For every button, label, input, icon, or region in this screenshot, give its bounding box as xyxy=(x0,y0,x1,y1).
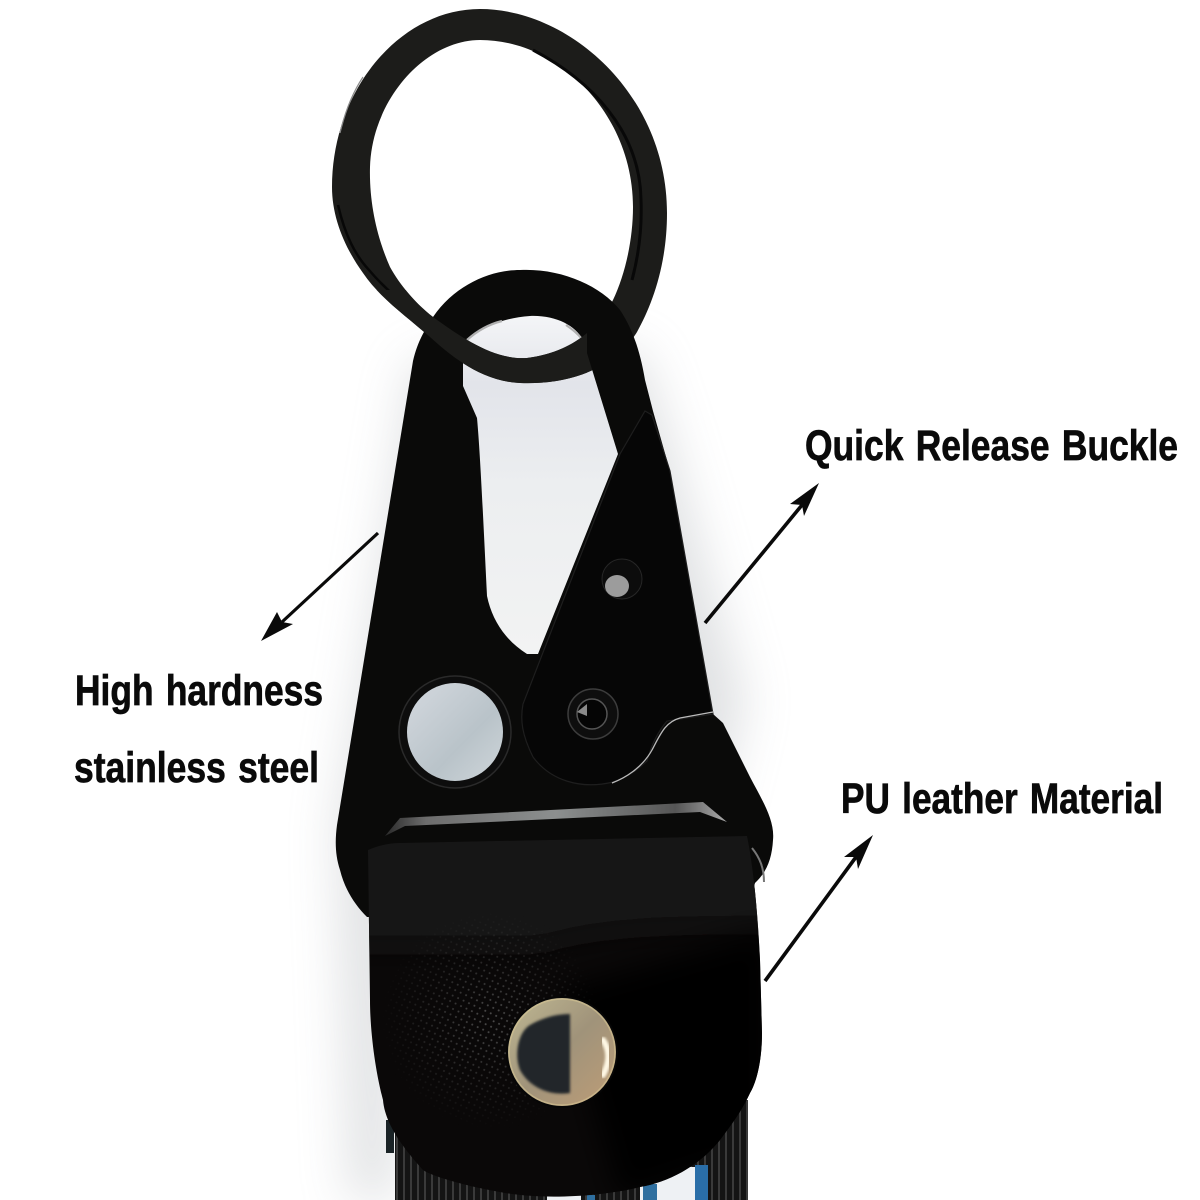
arrow: high hardness stainless steel xyxy=(261,533,378,641)
buckle body with hook and holes xyxy=(336,270,773,917)
arrow: quick release buckle xyxy=(705,483,819,623)
hook inner gloss xyxy=(467,321,582,340)
ring front segment xyxy=(376,290,587,384)
latch small hole xyxy=(602,559,642,599)
metal slot highlight xyxy=(385,802,764,882)
strap xyxy=(386,1100,748,1200)
label: high hardness stainless steel: High hardness xyxy=(75,667,323,715)
opening backdrop xyxy=(463,316,618,654)
split key ring xyxy=(332,9,667,383)
latch xyxy=(522,411,713,785)
latch pivot screw xyxy=(568,689,618,739)
arrow: PU leather material xyxy=(765,835,873,981)
PU leather flap xyxy=(368,836,762,1197)
label: high hardness stainless steel xyxy=(74,667,323,792)
soft shadow around buckle xyxy=(337,350,745,1200)
label: high hardness stainless steel: stainless steel xyxy=(74,744,319,792)
big round hole xyxy=(399,676,511,788)
brass rivet xyxy=(506,996,618,1108)
